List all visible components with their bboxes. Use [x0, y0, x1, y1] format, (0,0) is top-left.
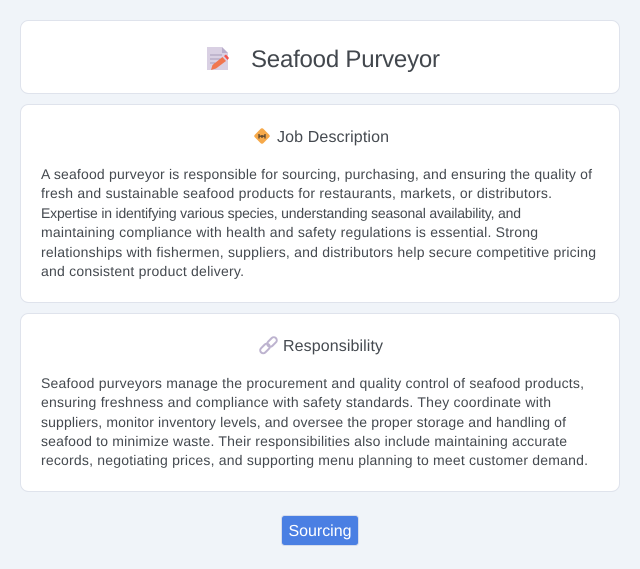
text block: job description: relationships with fishermen, suppliers, and distributors help secure competitive pricing	[41, 244, 596, 260]
tag: sourcing: Sourcing	[288, 523, 352, 540]
text block: responsibility: Seafood purveyors manage the procurement and quality control of seafood products,	[41, 375, 584, 391]
heading: responsibility: Responsibility	[283, 338, 383, 355]
icon: orange diamond sign	[254, 128, 270, 144]
text block: responsibility: records, negotiating prices, and supporting menu planning to meet customer demand.	[41, 452, 588, 468]
text block: responsibility	[41, 375, 588, 468]
heading: job description: Job Description	[277, 129, 389, 146]
text block: job description: Expertise in identifying various species, understanding seasonal availability, and	[41, 205, 521, 221]
title text: Seafood Purveyor	[251, 46, 440, 73]
text block: job description	[41, 166, 596, 279]
text block: responsibility: suppliers, monitor inventory levels, and oversee the proper storage and handling of	[41, 414, 566, 430]
panel: responsibility	[20, 314, 620, 492]
text block: job description: fresh and sustainable seafood products for restaurants, markets, or distributors.	[41, 185, 552, 201]
text block: job description: A seafood purveyor is responsible for sourcing, purchasing, and ensuring the quality of	[41, 166, 592, 182]
text block: responsibility: seafood to minimize waste. Their responsibilities also include maintaining accurate	[41, 433, 567, 449]
tag: sourcing	[282, 516, 358, 546]
icon: chain link	[259, 336, 278, 355]
panel: job description	[20, 104, 620, 302]
text block: job description: maintaining compliance with health and safety regulations is essential. Strong	[41, 224, 538, 240]
text block: responsibility: ensuring freshness and compliance with safety standards. They coordinate with	[41, 394, 551, 410]
panel: title	[20, 20, 620, 94]
text block: job description: and consistent product delivery.	[41, 263, 244, 279]
icon: memo with pencil	[207, 47, 229, 70]
